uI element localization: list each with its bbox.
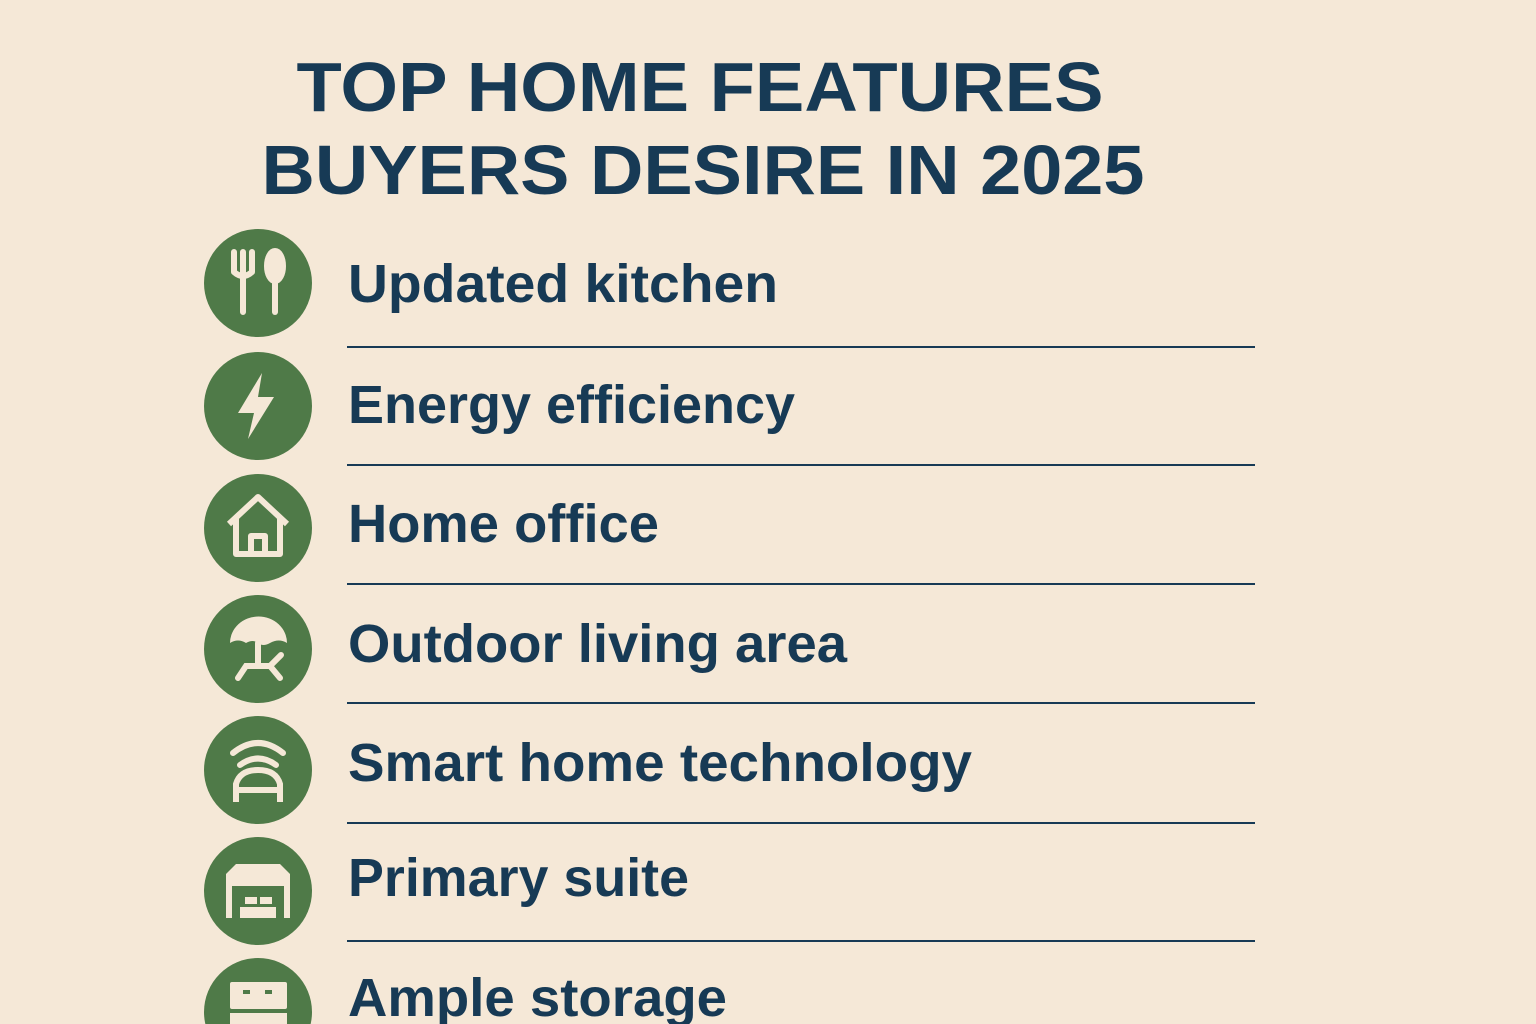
item: updated kitchen: Updated kitchen [348,254,778,314]
item: energy efficiency: Energy efficiency [348,375,795,435]
title [262,48,1144,209]
item: outdoor living [204,595,848,703]
item: ample storage [204,958,727,1024]
icon: lightning [204,352,312,460]
icon: house [204,474,312,582]
item: home office: Home office [348,494,659,554]
item: smart home: Smart home technology [348,733,972,793]
title: TOP HOME FEATURES [296,48,1104,126]
item: updated kitchen [204,229,778,337]
item: energy efficiency [204,352,795,460]
icon: bed room [204,837,312,945]
title: BUYERS DESIRE IN 2025 [262,131,1144,209]
item: home office [204,474,659,582]
icon: fork and spoon [204,229,312,337]
icon: umbrella chair [204,595,312,703]
icon: wifi house [204,716,312,824]
item: primary suite [204,837,689,945]
item: smart home [204,716,972,824]
item: outdoor living: Outdoor living area [348,614,848,674]
item: primary suite: Primary suite [348,848,689,908]
icon: cabinet [204,958,312,1024]
